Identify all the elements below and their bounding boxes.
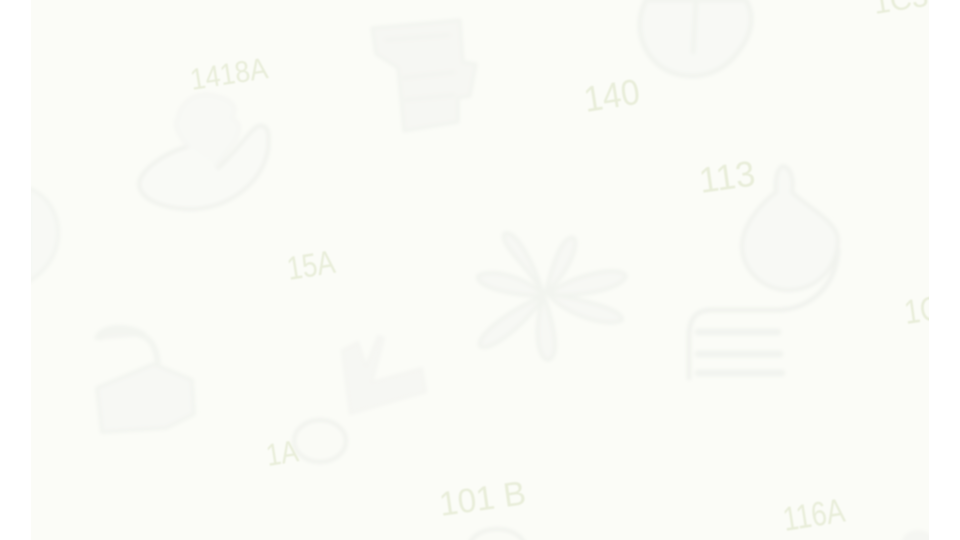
- icon: bottom ring: [469, 529, 525, 540]
- label: 101 B: 101 B: [437, 474, 528, 524]
- icon: rubber duck: [139, 94, 269, 209]
- label: 116A: 116A: [780, 492, 848, 539]
- icon: stacked machine block: [372, 20, 476, 131]
- icon: star flower: [534, 276, 576, 308]
- icon: tool block: [342, 336, 426, 414]
- label: 1418A: 1418A: [188, 52, 270, 97]
- icon: bottom right shape: [902, 530, 934, 540]
- label: 1C right edge: 1C: [902, 289, 943, 332]
- label: 15A: 15A: [284, 243, 338, 287]
- icon: round bulb at top: [645, 0, 745, 64]
- icon: drop with comb lines: [689, 166, 838, 378]
- icon: small ring: [294, 420, 346, 462]
- label: 1A: 1A: [264, 433, 301, 473]
- label: 113: 113: [696, 153, 758, 201]
- label: 140: 140: [581, 71, 643, 120]
- icon: left edge circle: [28, 188, 58, 282]
- icon: padlock: [97, 329, 194, 432]
